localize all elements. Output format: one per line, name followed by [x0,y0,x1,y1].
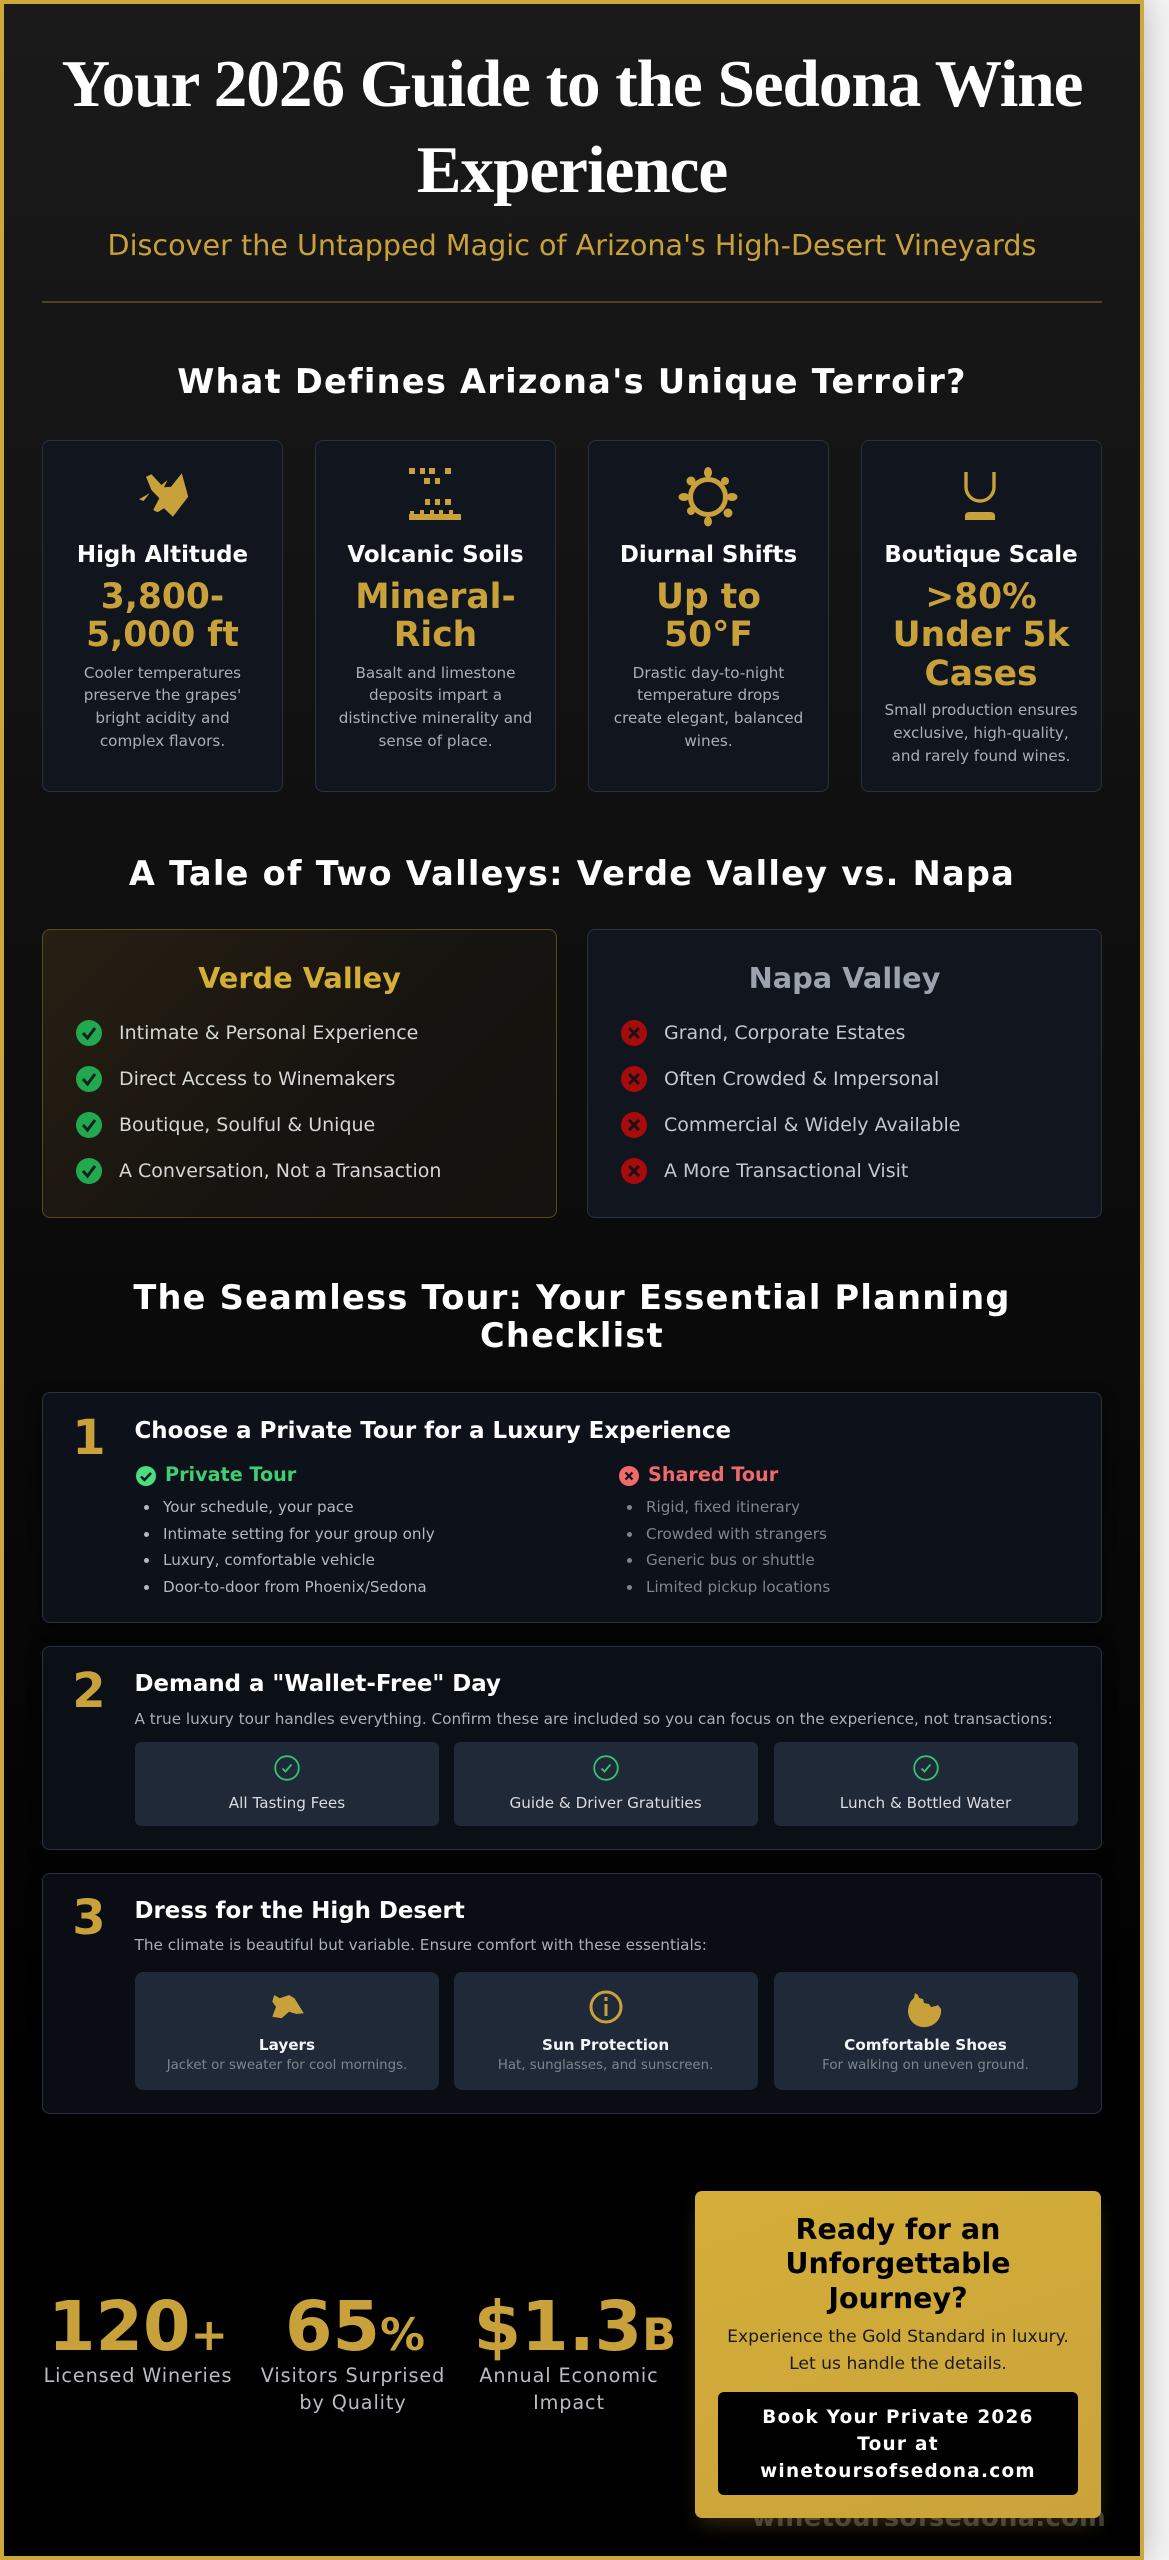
icon: check circle [274,1755,300,1781]
column heading: Private Tour [165,1463,296,1486]
card text [84,664,241,750]
item text: Hat, sunglasses, and sunscreen. [498,2058,713,2073]
stat label: Licensed Wineries [44,2364,232,2387]
list: Intimate setting for your group only [163,1525,435,1543]
cta heading: Unforgettable [785,2247,1011,2280]
step text: A true luxury tour handles everything. Confirm these are included so you can focus on the experience, not transactions: [134,1710,1053,1728]
item text: For walking on uneven ground. [822,2058,1029,2073]
card title: High Altitude [77,542,248,568]
step title: Dress for the High Desert [134,1898,465,1924]
icon: mountain [139,473,188,517]
icon: soil layers [409,468,461,520]
card text: and rarely found wines. [892,747,1070,765]
item title: Comfortable Shoes [844,2036,1007,2054]
item: lunch [774,1742,1078,1826]
card value: >80% [925,577,1037,617]
stat value: 65% [285,2288,425,2367]
item: sun protection [454,1972,758,2090]
icon: jacket [272,1995,304,2018]
card text: sense of place. [378,732,493,750]
card text: create elegant, balanced [614,709,803,727]
call to action [695,2191,1101,2518]
list: Rigid, fixed itinerary [646,1498,800,1516]
stat label [459,2362,679,2416]
stat label: Annual Economic [479,2364,659,2387]
list [627,1498,830,1596]
panel title: Napa Valley [749,961,940,995]
list: Luxury, comfortable vehicle [163,1551,375,1569]
title [62,46,1082,207]
label: Guide & Driver Gratuities [509,1794,702,1812]
row: A Conversation, Not a Transaction [119,1160,441,1182]
watermark text behind call to action: winetoursofsedona.com [752,2503,1106,2533]
cta heading: Ready for an [796,2212,1000,2246]
icon: cross [619,1466,639,1486]
icon: wine glass [964,472,996,520]
icon: check circle [913,1755,939,1781]
cta button: Book Your Private 2026 [762,2407,1034,2428]
stat label: Impact [533,2391,605,2414]
private tour column [136,1463,435,1596]
cta text: Experience the Gold Standard in luxury. [727,2326,1069,2346]
icon: sun [678,467,738,526]
step text: The climate is beautiful but variable. Ensure comfort with these essentials: [134,1936,707,1954]
row: Direct Access to Winemakers [119,1068,395,1090]
panel: boutique scale [860,440,1102,792]
card value: Mineral- [355,577,516,617]
heading: checklist: The Seamless Tour: Your Essential Planning [133,1278,1011,1317]
panel: step 2 [42,1646,1102,1850]
shared tour column [619,1463,830,1596]
card value [893,577,1070,694]
card text: Drastic day-to-night [633,664,784,682]
card text: deposits impart a [369,686,502,704]
icon: check [136,1466,156,1486]
column heading: Shared Tour [648,1463,778,1486]
row: Commercial & Widely Available [664,1114,960,1136]
card title: Boutique Scale [884,542,1078,568]
item: layers [135,1972,439,2090]
stat: wineries [44,2288,232,2387]
list: Crowded with strangers [646,1525,827,1543]
title: Your 2026 Guide to the Sedona Wine [62,46,1082,121]
cta heading: Journey? [828,2282,968,2314]
card text: Cooler temperatures [84,664,241,682]
row: Boutique, Soulful & Unique [119,1114,375,1136]
icon: check circle [593,1755,619,1781]
cta text [695,2324,1101,2378]
subtitle: Discover the Untapped Magic of Arizona's High-Desert Vineyards [108,228,1036,262]
card text [884,701,1078,765]
step number: 1 [72,1410,106,1466]
card text: distinctive minerality and [339,709,532,727]
item: shoes [774,1972,1078,2090]
heading: checklist: Checklist [480,1316,664,1355]
title: Experience [417,132,727,207]
stat: visitors [260,2288,445,2414]
list: Generic bus or shuttle [646,1551,815,1569]
cta text: Let us handle the details. [789,2354,1007,2374]
stat: economic impact [474,2288,676,2414]
cta button: Tour at [857,2434,939,2455]
card value: 3,800- [101,577,224,617]
card value: Under 5k [893,615,1069,655]
cta button [718,2392,1078,2495]
cta button: winetoursofsedona.com [760,2461,1036,2482]
card value: 5,000 ft [86,615,239,655]
item: gratuities [454,1742,758,1826]
stat label [260,2364,445,2414]
card value: Cases [924,654,1038,694]
row: Grand, Corporate Estates [664,1022,905,1044]
card text [614,664,803,750]
list: Limited pickup locations [646,1578,830,1596]
heading: terroir: What Defines Arizona's Unique Terroir? [177,362,967,401]
card text [339,664,532,750]
step number: 3 [72,1890,106,1946]
card title: Volcanic Soils [347,542,524,568]
panel: diurnal shifts [588,440,829,792]
card text: temperature drops [637,686,780,704]
card value: Rich [394,615,477,655]
panel: step 1 [42,1392,1102,1623]
panel: step 3 [42,1873,1102,2114]
card text: Small production ensures [884,701,1078,719]
panel: verde valley [42,929,557,1218]
icon: info circle [590,1990,622,2024]
card text: preserve the grapes' [84,686,241,704]
icon: shoe [908,1993,942,2028]
card title: Diurnal Shifts [620,542,797,568]
stat value: 120+ [48,2288,228,2367]
row: A More Transactional Visit [664,1160,908,1182]
stat label: Visitors Surprised [261,2364,445,2387]
item: tasting fees [135,1742,439,1826]
label: All Tasting Fees [229,1794,345,1812]
card value [656,577,761,655]
card text: exclusive, high-quality, [893,724,1069,742]
list [144,1498,435,1596]
heading: valleys: A Tale of Two Valleys: Verde Valley vs. Napa [129,854,1015,892]
panel: napa valley [587,929,1102,1218]
item text: Jacket or sweater for cool mornings. [167,2058,407,2073]
panel: volcanic soils [315,440,556,792]
panel title: Verde Valley [198,961,401,995]
heading: checklist [133,1278,1011,1355]
card value [86,577,239,655]
item title: Sun Protection [542,2036,669,2054]
card text: complex flavors. [100,732,225,750]
step title: Demand a "Wallet-Free" Day [134,1671,501,1697]
item title: Layers [259,2036,315,2054]
step number: 2 [72,1663,106,1719]
label: Lunch & Bottled Water [840,1794,1011,1812]
row: Often Crowded & Impersonal [664,1068,939,1090]
stat label: by Quality [299,2391,407,2414]
panel: high altitude [42,440,283,792]
list: Door-to-door from Phoenix/Sedona [163,1578,427,1596]
list: Your schedule, your pace [163,1498,354,1516]
stat value: $1.3B [474,2288,676,2367]
row: Intimate & Personal Experience [119,1022,418,1044]
card text: bright acidity and [95,709,230,727]
card value: 50°F [664,615,753,655]
card text: wines. [684,732,733,750]
card value: Up to [656,577,761,617]
step title: Choose a Private Tour for a Luxury Experience [134,1418,731,1444]
card text: Basalt and limestone [355,664,516,682]
card value [355,577,516,655]
cta heading [695,2212,1101,2316]
